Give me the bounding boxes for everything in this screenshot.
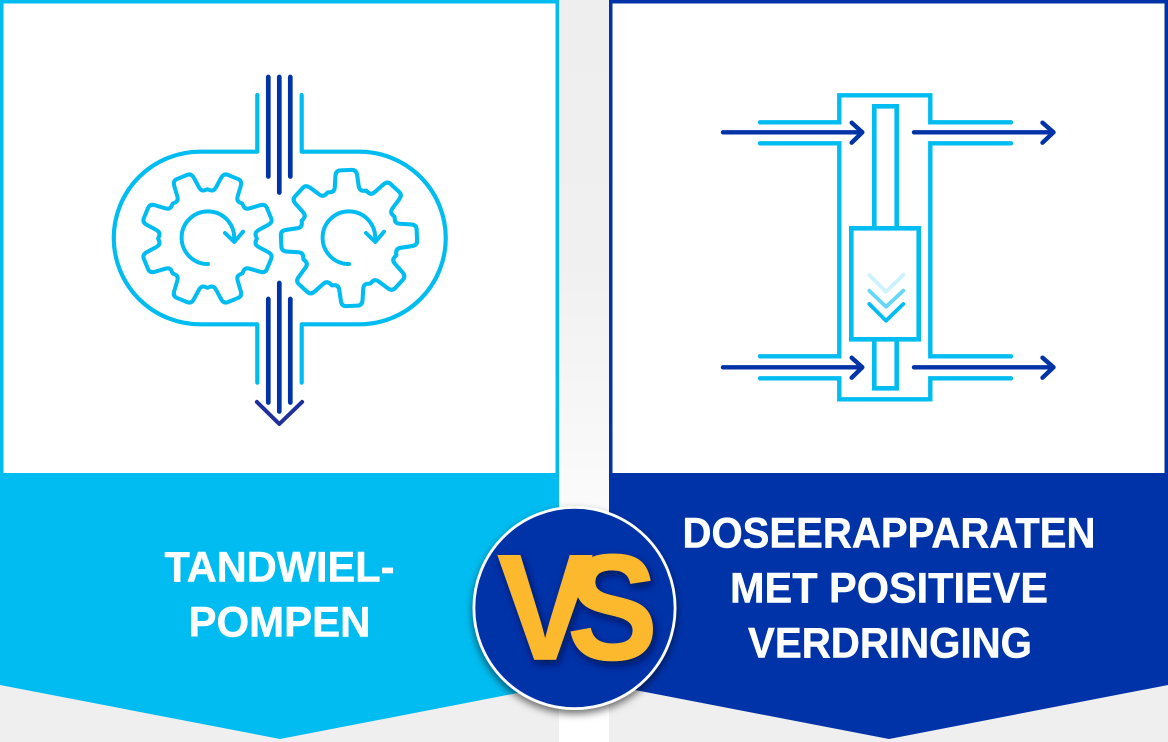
flow arrow: top right (914, 123, 1054, 143)
panel: tandwielpompen (0, 2, 559, 739)
heading: tandwielpompen: TANDWIEL- (164, 544, 394, 592)
downward chevrons (869, 275, 903, 321)
right gear (278, 167, 420, 309)
flow arrow: bottom left (723, 358, 862, 378)
centre divider strip (559, 0, 609, 742)
inflow lines (268, 77, 290, 192)
piston chamber (851, 228, 919, 339)
panel: doseerapparaten (609, 2, 1168, 739)
outflow arrowhead (257, 402, 302, 424)
panel frame (611, 2, 1166, 475)
banner: tandwielpompen (0, 473, 559, 739)
heading: doseerapparaten: VERDRINGING (748, 619, 1032, 667)
vs lettering: S (568, 523, 658, 691)
icon: gear pump (114, 77, 446, 424)
vs lettering: V (498, 523, 592, 691)
heading: tandwielpompen: POMPEN (188, 599, 370, 647)
heading: tandwielpompen (164, 544, 394, 647)
badge disc (474, 507, 675, 709)
flow arrow: top left (723, 123, 862, 143)
vs lettering (498, 523, 658, 691)
housing and pipes (760, 95, 1011, 399)
heading: doseerapparaten (682, 510, 1096, 667)
right rotation arrow (323, 211, 384, 264)
left rotation arrow (182, 211, 243, 264)
heading: doseerapparaten: MET POSITIEVE (730, 565, 1048, 613)
piston rod (874, 106, 897, 388)
heading: doseerapparaten: DOSEERAPPARATEN (682, 510, 1096, 558)
icon: positive displacement doser (723, 95, 1054, 399)
panel frame (2, 2, 557, 475)
flow arrow: bottom right (914, 358, 1054, 378)
banner: doseerapparaten (609, 473, 1168, 739)
outflow lines (268, 283, 290, 412)
pump housing (114, 95, 446, 383)
left gear (139, 170, 276, 307)
vs badge (474, 507, 675, 709)
